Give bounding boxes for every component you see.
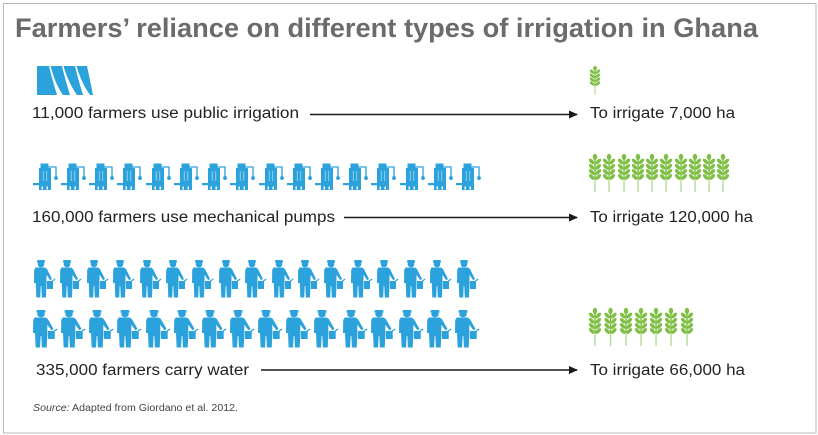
row: public irrigation bbox=[32, 66, 736, 122]
icons: farmers carrying water, bottom row bbox=[33, 310, 480, 348]
row: mechanical pumps bbox=[32, 154, 754, 226]
arrow: mechanical pumps bbox=[344, 216, 577, 218]
icon: wheat, 7,000 ha bbox=[589, 66, 601, 95]
source note: Source: Adapted from Giordano et al. 2012. bbox=[33, 402, 238, 414]
icons: pumps bbox=[33, 164, 481, 190]
icons: farmers carrying water, top row bbox=[34, 260, 479, 298]
label: mechanical pumps: 160,000 farmers use mechanical pumps bbox=[32, 209, 335, 226]
label: 7,000 ha: To irrigate 7,000 ha bbox=[590, 105, 736, 122]
icon: public irrigation canal bbox=[37, 66, 93, 95]
arrow: public irrigation bbox=[310, 114, 577, 116]
label: public irrigation: 11,000 farmers use public irrigation bbox=[32, 105, 299, 122]
label: carry water: 335,000 farmers carry water bbox=[36, 362, 249, 379]
icons: wheat, 120,000 ha bbox=[588, 154, 730, 192]
label: 66,000 ha: To irrigate 66,000 ha bbox=[590, 362, 746, 379]
icons: wheat, 66,000 ha bbox=[588, 308, 694, 346]
row: carry water bbox=[33, 260, 746, 379]
label: 120,000 ha: To irrigate 120,000 ha bbox=[590, 209, 754, 226]
title: Farmers’ reliance on different types of irrigation in Ghana bbox=[15, 13, 759, 43]
arrow: carry water bbox=[261, 369, 577, 371]
